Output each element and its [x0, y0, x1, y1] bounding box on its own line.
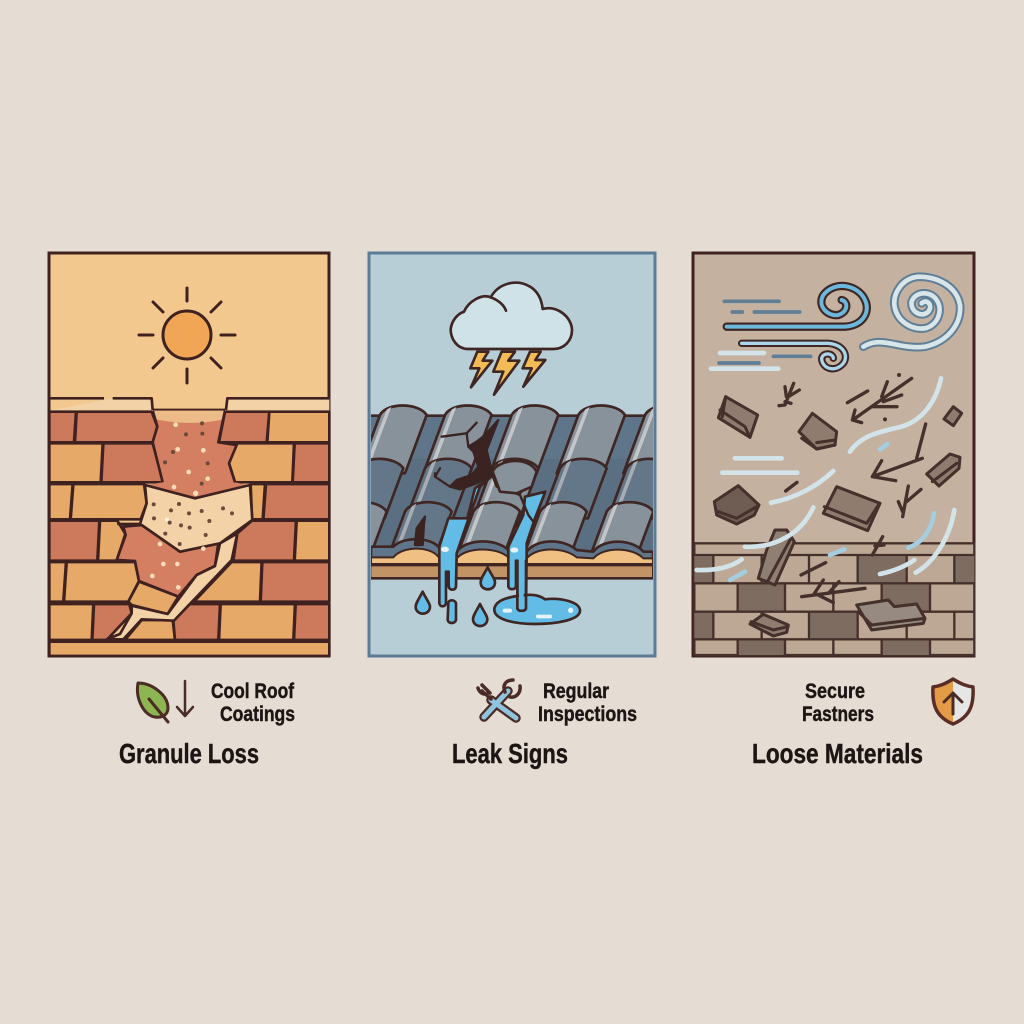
icon: sun — [139, 288, 235, 383]
icon: shield — [933, 679, 973, 724]
brick wall — [694, 543, 974, 655]
wind streaks — [697, 378, 954, 574]
granules — [150, 421, 234, 590]
panel: loose materials — [693, 253, 974, 656]
text: cool roof coatings: Coatings — [220, 703, 295, 726]
eave — [371, 538, 653, 558]
text: regular inspections — [538, 680, 637, 726]
cracks — [415, 420, 535, 545]
heading: loose materials: Loose Materials — [752, 738, 923, 769]
spiral wind — [863, 277, 960, 347]
bricks — [49, 412, 329, 656]
panel: granule loss — [49, 253, 329, 656]
brick wall with crack — [49, 398, 329, 656]
heading: leak signs: Leak Signs — [452, 738, 568, 769]
text: regular inspections: Regular — [543, 680, 609, 703]
heading: granule loss: Granule Loss — [119, 738, 259, 769]
icon: down arrow — [177, 681, 193, 716]
text: cool roof coatings — [211, 680, 295, 726]
text: secure fastners: Fastners — [802, 703, 874, 726]
icon: wrench and spanner — [478, 680, 520, 718]
debris: broken shingles — [714, 397, 962, 636]
text: secure fastners — [802, 680, 874, 726]
roof tiles — [371, 404, 653, 580]
text: cool roof coatings: Cool Roof — [211, 680, 295, 703]
icon: leaf — [137, 683, 168, 722]
exposed substrate — [107, 411, 252, 639]
panel: leak signs — [368, 252, 656, 658]
broken tile — [493, 461, 537, 493]
icon: storm cloud — [451, 283, 572, 395]
water streams — [439, 476, 545, 623]
wind lines — [711, 286, 867, 473]
icon: lightning bolts — [470, 352, 545, 395]
water drops — [416, 567, 495, 626]
text: regular inspections: Inspections — [538, 703, 637, 726]
debris: twigs — [779, 378, 926, 603]
text: secure fastners: Secure — [805, 680, 865, 703]
puddle — [494, 560, 580, 624]
